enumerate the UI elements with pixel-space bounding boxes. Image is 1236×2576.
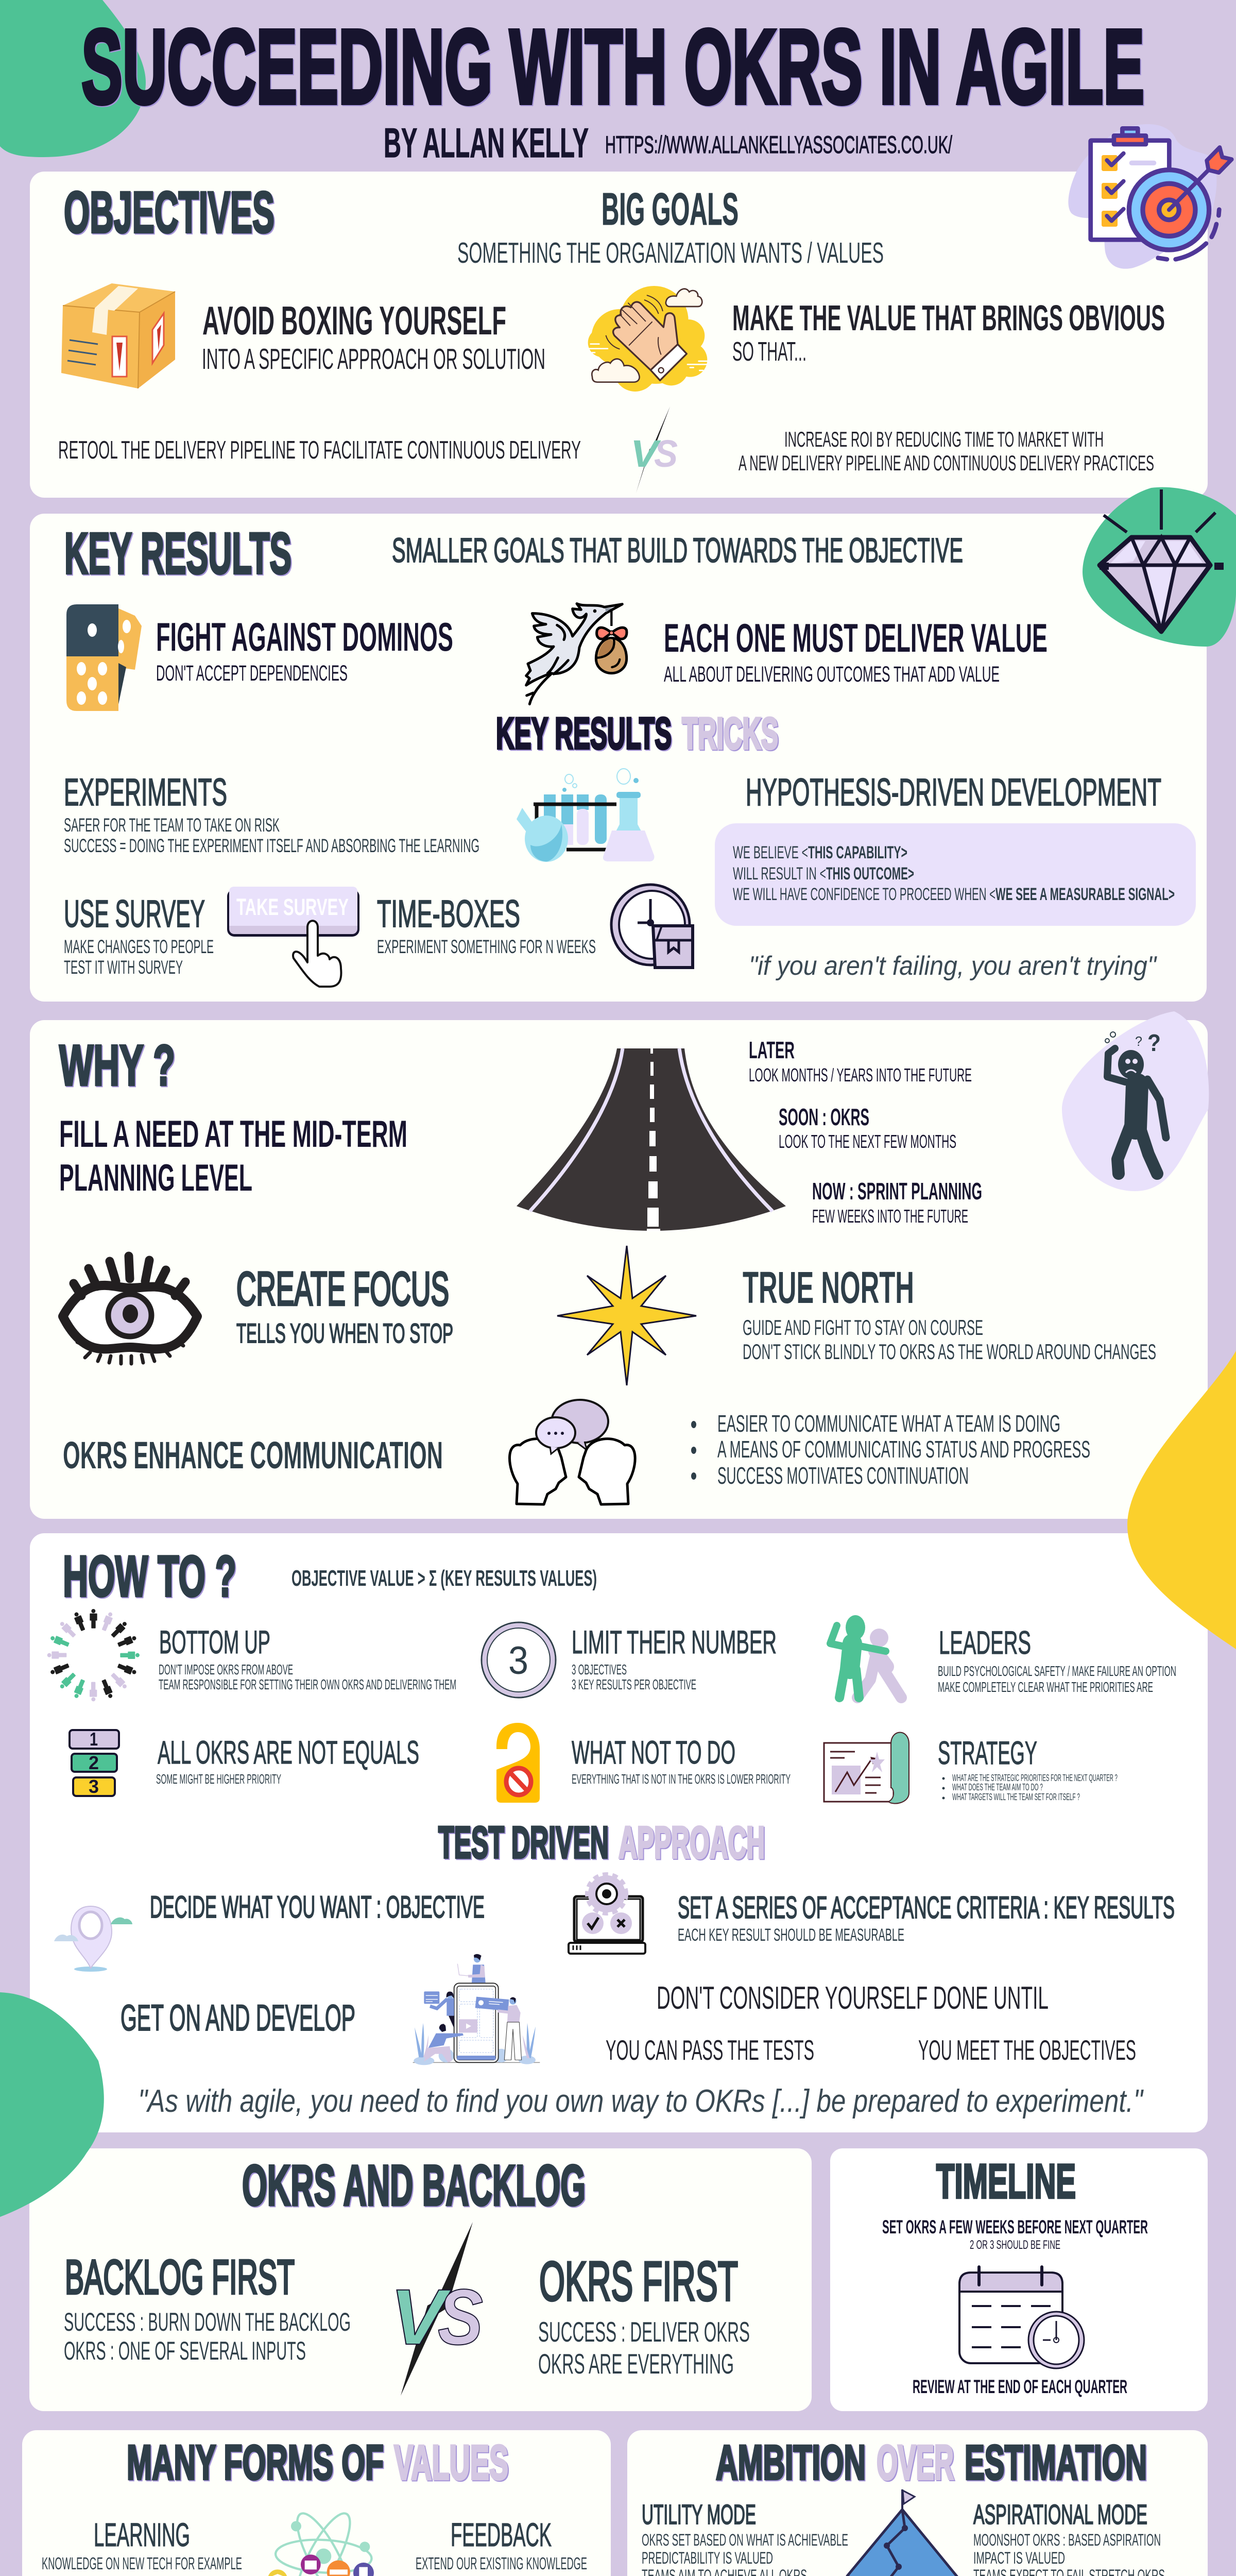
icon: two heads talking (509, 1400, 635, 1504)
panel: objectives (30, 172, 1208, 498)
text: big goals: BIG GOALS (602, 183, 739, 234)
panel: hypothesis template: WE BELIEVE < (733, 843, 808, 862)
text: feedback (416, 2516, 587, 2573)
panel: why (30, 1020, 1208, 1519)
text: each one must deliver value: ALL ABOUT DELIVERING OUTCOMES THAT ADD VALUE (664, 662, 1000, 687)
text: soon (779, 1104, 956, 1152)
text: experiments: SAFER FOR THE TEAM TO TAKE ON RISK (64, 815, 280, 836)
text: fill a need (59, 1113, 407, 1199)
text: backlog first: SUCCESS : BURN DOWN THE BACKLOG (64, 2308, 351, 2336)
text: what not to do: EVERYTHING THAT IS NOT IN THE OKRS IS LOWER PRIORITY (572, 1771, 791, 1787)
icon: cardboard box (61, 283, 175, 388)
icon: strategy chart (824, 1732, 909, 1804)
text: strategy: WHAT DOES THE TEAM AIM TO DO ? (952, 1782, 1043, 1792)
quote: failing and trying: "if you aren't failing, you aren't trying" (749, 951, 1157, 981)
text: later: LATER (749, 1037, 795, 1063)
icon: versus mark (390, 2222, 483, 2396)
text: leaders (938, 1625, 1176, 1695)
heading: okrs and backlog: OKRS AND BACKLOG (242, 2154, 586, 2217)
text: bottom up: TEAM RESPONSIBLE FOR SETTING THEIR OWN OKRS AND DELIVERING THEM (159, 1676, 456, 1692)
text: backlog first (64, 2250, 351, 2365)
text: decide what you want: DECIDE WHAT YOU WANT : OBJECTIVE (150, 1890, 485, 1924)
icon: number three in ring: 3 (508, 1639, 528, 1683)
text: strategy: WHAT TARGETS WILL THE TEAM SET FOR ITSELF ? (952, 1792, 1080, 1802)
heading: why: WHY ? (59, 1033, 175, 1097)
text: experiments (64, 771, 479, 856)
icon: team building an app (413, 1954, 540, 2065)
icon: do not disturb door hanger (496, 1723, 540, 1803)
text: use survey: MAKE CHANGES TO PEOPLE (64, 936, 214, 957)
icon: confused person on lavender blob: ? (1147, 1029, 1161, 1056)
icon: confused person on lavender blob: ? (1135, 1033, 1142, 1049)
icon: take survey button (227, 887, 359, 987)
heading: many forms of values: VALUES (394, 2435, 508, 2490)
icon: waving hand (588, 286, 707, 392)
text: what not to do: WHAT NOT TO DO (572, 1735, 735, 1771)
text: avoid boxing yourself (202, 298, 545, 376)
text: bottom up: DON'T IMPOSE OKRS FROM ABOVE (159, 1662, 293, 1677)
text: fight against dominos: DON'T ACCEPT DEPENDENCIES (156, 661, 348, 686)
decorative green blob left (0, 1992, 104, 2217)
icon: versus mark: S (654, 432, 678, 475)
list: communication benefits: SUCCESS MOTIVATES CONTINUATION (717, 1462, 969, 1489)
panel: ambition over estimation (627, 2430, 1208, 2576)
text: utility mode: PREDICTABILITY IS VALUED (642, 2549, 773, 2567)
text: feedback: EXTEND OUR EXISTING KNOWLEDGE (416, 2554, 587, 2573)
heading: ambition over estimation: OVER (877, 2435, 954, 2490)
icon: checklist and target (1068, 124, 1232, 269)
icon: versus mark (630, 406, 678, 493)
heading: key results: KEY RESULTS (64, 521, 291, 586)
decorative green blob top left (0, 0, 146, 157)
text: limit their number (572, 1624, 777, 1692)
text: okrs first: OKRS FIRST (539, 2250, 738, 2312)
text: soon: LOOK TO THE NEXT FEW MONTHS (779, 1131, 956, 1152)
text: utility mode: OKRS SET BASED ON WHAT IS ACHIEVABLE (642, 2531, 848, 2549)
text: true north: GUIDE AND FIGHT TO STAY ON COURSE (743, 1315, 983, 1340)
text: utility mode (642, 2499, 848, 2576)
heading: objectives: OBJECTIVES (64, 180, 274, 245)
heading: how to: HOW TO ? (63, 1544, 236, 1608)
text: use survey (64, 892, 214, 978)
text: objective value formula: OBJECTIVE VALUE > Σ (KEY RESULTS VALUES) (291, 1566, 597, 1591)
text: big goals: SOMETHING THE ORGANIZATION WANTS / VALUES (457, 236, 884, 269)
text: strategy (938, 1735, 1118, 1802)
icon: road to horizon (517, 1048, 786, 1231)
text: experiments: EXPERIMENTS (64, 771, 227, 814)
icon: priority list (70, 1728, 119, 1797)
icon: versus mark: V (630, 432, 661, 475)
text: later: LOOK MONTHS / YEARS INTO THE FUTURE (749, 1064, 972, 1086)
icon: location pin (54, 1906, 132, 1972)
text: set okrs before next quarter: 2 OR 3 SHOULD BE FINE (970, 2238, 1060, 2252)
icon: eye (63, 1256, 197, 1364)
text: big goals (457, 183, 884, 269)
text: make the value obvious: SO THAT... (732, 337, 806, 367)
text: use survey: USE SURVEY (64, 892, 205, 935)
text: now (812, 1178, 982, 1227)
icon: circle of people (47, 1609, 140, 1701)
icon: stork carrying bundle (526, 604, 627, 704)
icon: domino (66, 604, 142, 711)
text: increase roi (739, 427, 1154, 475)
heading: test driven approach: APPROACH (619, 1818, 765, 1868)
text: bottom up (159, 1624, 456, 1692)
text: make the value obvious (732, 298, 1165, 367)
text: all okrs are not equals (156, 1735, 419, 1787)
icon: take survey button: TAKE SURVEY (236, 894, 349, 920)
icon: clock and box (611, 885, 693, 968)
text: limit their number: LIMIT THEIR NUMBER (572, 1624, 777, 1660)
icon: mountain with flag (847, 2489, 958, 2576)
text: fill a need: FILL A NEED AT THE MID-TERM (59, 1113, 407, 1155)
text: avoid boxing yourself: INTO A SPECIFIC APPROACH OR SOLUTION (202, 343, 545, 376)
text: limit their number: 3 OBJECTIVES (572, 1662, 627, 1677)
text: aspirational mode (973, 2499, 1165, 2576)
text: experiments: SUCCESS = DOING THE EXPERIMENT ITSELF AND ABSORBING THE LEARNING (64, 835, 479, 856)
byline: HTTPS://WWW.ALLANKELLYASSOCIATES.CO.UK/ (605, 131, 953, 158)
text: don't consider yourself done (606, 1980, 1136, 2066)
text: learning (42, 2516, 242, 2573)
text: acceptance criteria (678, 1890, 1175, 1945)
text: leaders: LEADERS (939, 1625, 1031, 1661)
text: true north (743, 1263, 1156, 1364)
text: true north: TRUE NORTH (743, 1263, 914, 1313)
heading: ambition over estimation (716, 2435, 1147, 2490)
icon: priority list: 2 (89, 1752, 99, 1773)
text: strategy: STRATEGY (938, 1735, 1037, 1771)
byline (384, 120, 953, 166)
text: all okrs are not equals: ALL OKRS ARE NOT EQUALS (158, 1735, 419, 1771)
panel: okrs and backlog (29, 2148, 812, 2411)
text: all okrs are not equals: SOME MIGHT BE HIGHER PRIORITY (156, 1771, 281, 1787)
heading: key results tricks: KEY RESULTS (496, 709, 672, 758)
text: get on and develop: GET ON AND DEVELOP (121, 1998, 355, 2039)
text: learning: LEARNING (94, 2516, 190, 2553)
heading: ambition over estimation: AMBITION (716, 2435, 866, 2490)
heading: many forms of values: MANY FORMS OF (127, 2435, 384, 2490)
text: create focus: CREATE FOCUS (236, 1263, 449, 1315)
byline: BY ALLAN KELLY (384, 120, 589, 166)
text: okrs first: SUCCESS : DELIVER OKRS (538, 2316, 750, 2348)
text: time-boxes: EXPERIMENT SOMETHING FOR N WEEKS (377, 936, 596, 957)
text: create focus: TELLS YOU WHEN TO STOP (236, 1318, 453, 1349)
icon: priority list: 1 (90, 1728, 98, 1750)
text: feedback: FEEDBACK (451, 2516, 552, 2553)
text: bottom up: BOTTOM UP (159, 1624, 270, 1660)
icon: atom over open book (259, 2507, 389, 2576)
text: okrs enhance communication: OKRS ENHANCE COMMUNICATION (63, 1434, 443, 1477)
text: fight against dominos: FIGHT AGAINST DOMINOS (156, 614, 453, 659)
text: retool the delivery pipeline: RETOOL THE DELIVERY PIPELINE TO FACILITATE CONTINUOUS DELIVERY (58, 436, 581, 464)
text: what not to do (572, 1735, 791, 1787)
text: don't consider yourself done: YOU CAN PASS THE TESTS (606, 2034, 814, 2066)
decorative yellow blob (1127, 1351, 1236, 1649)
panel: key results (30, 514, 1207, 1002)
icon: versus mark: V (390, 2273, 452, 2361)
text: soon: SOON : OKRS (779, 1104, 869, 1130)
icon: calendar and clock (959, 2267, 1084, 2368)
panel: hypothesis template: WILL RESULT IN < (733, 864, 826, 884)
icon: diamond on green blob (1083, 487, 1236, 647)
text: acceptance criteria: EACH KEY RESULT SHOULD BE MEASURABLE (678, 1925, 904, 1945)
text: backlog first: BACKLOG FIRST (65, 2250, 295, 2304)
icon: gear and laptop checks (569, 1875, 645, 1954)
text: use survey: TEST IT WITH SURVEY (64, 957, 183, 978)
icon: versus mark: S (438, 2273, 483, 2361)
text: create focus (236, 1263, 453, 1349)
text: utility mode: UTILITY MODE (642, 2499, 756, 2530)
icon: number three in ring (482, 1622, 556, 1698)
text: now: NOW : SPRINT PLANNING (812, 1178, 982, 1205)
panel: hypothesis template: THIS CAPABILITY> (808, 843, 907, 862)
text: limit their number: 3 KEY RESULTS PER OBJECTIVE (572, 1676, 696, 1692)
heading: key results tricks: TRICKS (682, 709, 778, 758)
text: later (749, 1037, 972, 1086)
heading: timeline: TIMELINE (936, 2154, 1076, 2208)
panel: hypothesis template: WE WILL HAVE CONFIDENCE TO PROCEED WHEN < (733, 885, 995, 904)
icon: priority list: 3 (89, 1776, 99, 1797)
text: now: FEW WEEKS INTO THE FUTURE (812, 1206, 968, 1227)
text: fill a need: PLANNING LEVEL (59, 1157, 252, 1199)
icon: north star (557, 1246, 696, 1385)
text: time-boxes: TIME-BOXES (377, 892, 520, 935)
text: learning: KNOWLEDGE ON NEW TECH FOR EXAMPLE (42, 2554, 242, 2573)
panel: many forms of values (22, 2430, 611, 2576)
text: fight against dominos (156, 614, 453, 686)
text: avoid boxing yourself: AVOID BOXING YOURSELF (202, 298, 506, 343)
text: set okrs before next quarter (882, 2216, 1148, 2252)
text: backlog first: OKRS : ONE OF SEVERAL INPUTS (64, 2336, 306, 2365)
heading: test driven approach: TEST DRIVEN (438, 1818, 609, 1868)
text: time-boxes (377, 892, 596, 957)
text: each one must deliver value (664, 615, 1048, 687)
panel: timeline (830, 2148, 1208, 2411)
icon: leaders helping (830, 1615, 901, 1698)
text: okrs first: OKRS ARE EVERYTHING (538, 2348, 734, 2380)
text: okrs first (538, 2250, 750, 2380)
icon: confused person on lavender blob (1062, 1011, 1209, 1191)
text: aspirational mode: IMPACT IS VALUED (973, 2549, 1065, 2567)
icon: lab flasks (517, 769, 654, 862)
panel: how to (30, 1533, 1208, 2132)
panel: hypothesis template (715, 823, 1196, 926)
panel: hypothesis template: THIS OUTCOME> (826, 864, 914, 884)
list: communication benefits (691, 1410, 1090, 1489)
